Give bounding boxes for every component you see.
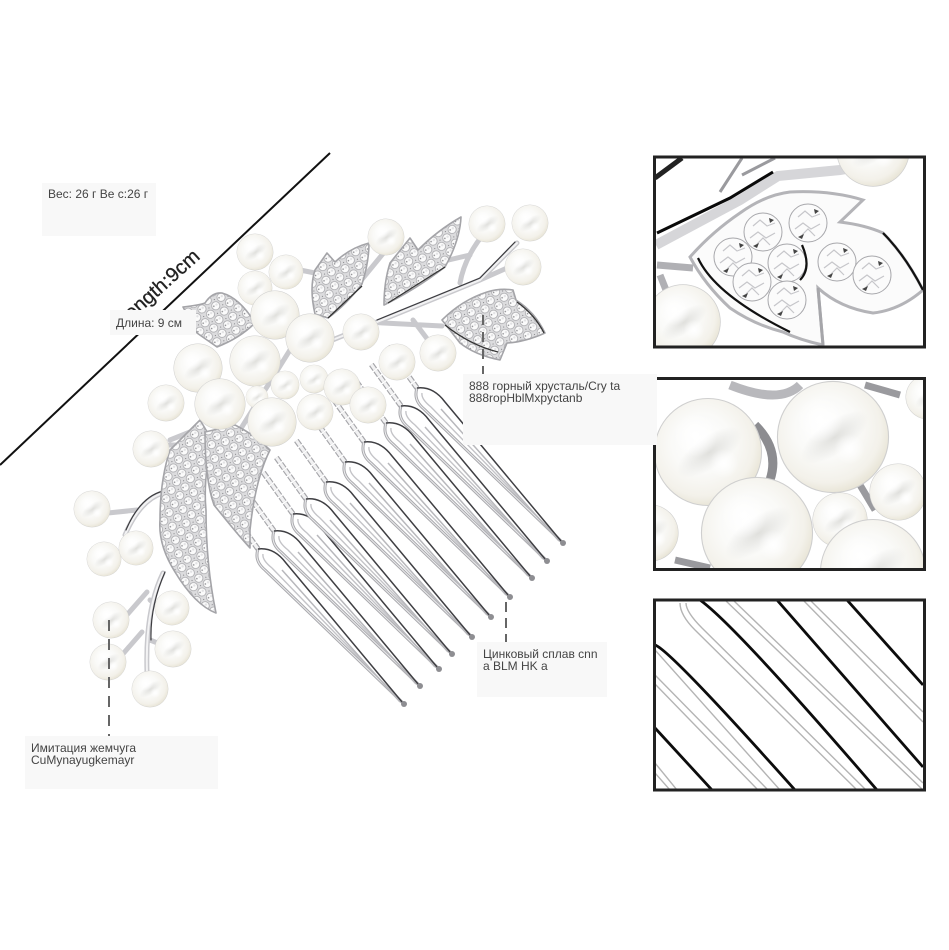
- label: zinc alloy: Цинковый сплав cnn: [483, 647, 598, 661]
- panel frame: [654, 378, 924, 570]
- panel frame: [654, 157, 924, 347]
- detail panel: pearls: [653, 377, 926, 571]
- label: weight: Вес: 26 г Ве с:26 г: [48, 187, 148, 201]
- comb teeth: [228, 346, 566, 707]
- label: zinc alloy: a BLM HK a: [483, 659, 548, 673]
- pearls: [74, 205, 548, 707]
- label: rhinestone: [463, 374, 657, 445]
- label: imitation pearl: CuMynayugkemayr: [31, 753, 134, 767]
- enlarged leaf: [690, 192, 923, 345]
- dimension line: length: [0, 153, 330, 465]
- leaf dark edges: [328, 267, 544, 352]
- rhinestone leaves: [160, 217, 545, 613]
- label: rhinestone: 888 горный хрусталь/Cry ta: [469, 379, 620, 393]
- black tooth edges: [655, 600, 923, 790]
- rotated length text: Length:9cm: [112, 245, 204, 332]
- detail panel: zinc alloy teeth: [654, 600, 924, 790]
- label: weight: [42, 183, 156, 236]
- leaf dark edges and stems: [655, 158, 923, 345]
- enlarged crystals: [714, 204, 891, 319]
- large pearls: [656, 380, 923, 568]
- label: imitation pearl: Имитация жемчуга: [31, 741, 136, 755]
- leader line: zinc alloy: [505, 602, 507, 642]
- setting behind pearls: [675, 385, 900, 568]
- product: pearl hair comb: [74, 205, 566, 707]
- label: length: Длина: 9 см: [116, 316, 182, 330]
- detail panel: rhinestone leaf: [653, 156, 926, 348]
- grey tooth edges: [655, 600, 923, 790]
- label: imitation pearl: [25, 736, 218, 789]
- silver stems: [108, 230, 517, 672]
- leader line: rhinestone: [482, 315, 484, 374]
- label: rhinestone: 888ropHblMxpyctanb: [469, 391, 582, 405]
- label: length: [110, 310, 196, 335]
- label: zinc alloy: [477, 642, 607, 697]
- panel frame: [654, 600, 924, 790]
- enlarged pearls: [656, 158, 909, 346]
- leader line: pearl: [108, 620, 110, 736]
